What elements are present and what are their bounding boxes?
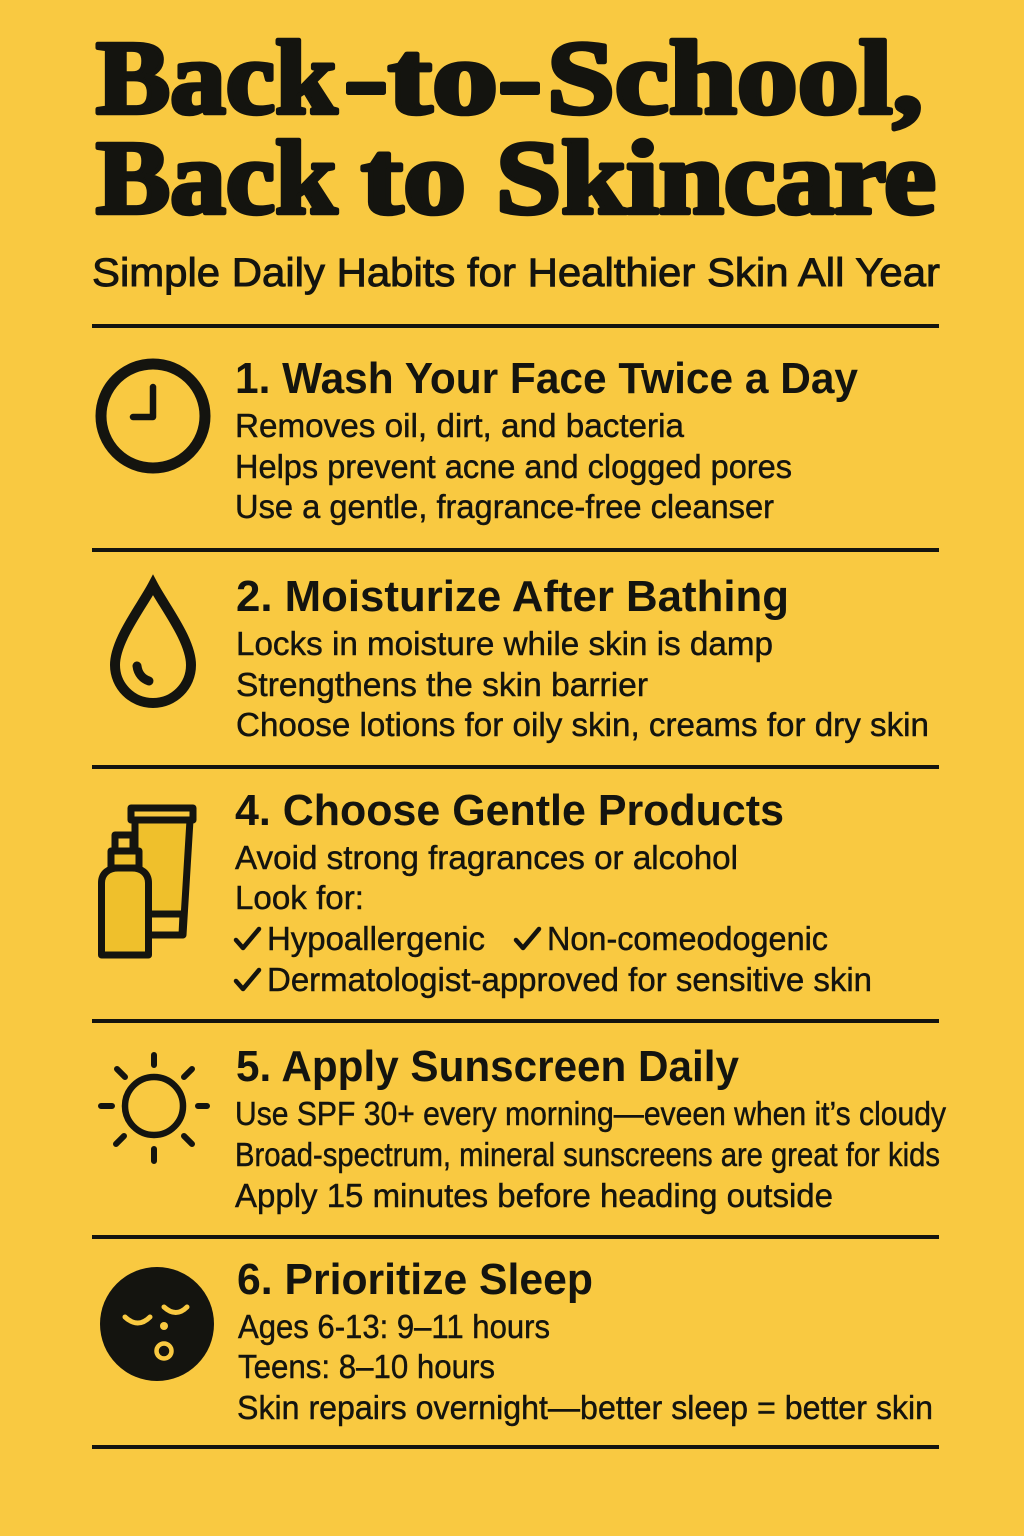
icon: tube and spray bottle [102, 808, 193, 955]
body 6: Skin repairs overnight—better sleep = better skin [237, 1389, 933, 1426]
section 1: wash your face [101, 354, 859, 525]
body 2: Locks in moisture while skin is damp [236, 625, 773, 662]
body 1: Removes oil, dirt, and bacteria [235, 407, 685, 444]
body 4: Avoid strong fragrances or alcohol [235, 839, 738, 876]
title: Back [96, 19, 338, 136]
subtitle: Simple Daily Habits for Healthier Skin All Year [92, 251, 940, 295]
body 2: Strengthens the skin barrier [236, 666, 648, 703]
checklist [236, 920, 872, 998]
body 5 [235, 1095, 946, 1214]
body 5: Use SPF 30+ every morning—eveen when it’s cloudy [235, 1095, 946, 1132]
title: Back [96, 119, 338, 236]
checklist: Dermatologist-approved for sensitive skin [267, 961, 872, 998]
icon: clock [101, 364, 205, 468]
title: Skincare [496, 119, 936, 236]
title [96, 19, 936, 236]
heading 4: 4. Choose Gentle Products [235, 786, 784, 835]
body 4 [235, 839, 872, 998]
body 6: Teens: 8–10 hours [238, 1348, 495, 1385]
body 2: Choose lotions for oily skin, creams for dry skin [236, 706, 929, 743]
heading 5: 5. Apply Sunscreen Daily [236, 1042, 739, 1091]
body 4: Look for: [235, 879, 364, 916]
body 1: Helps prevent acne and clogged pores [235, 448, 792, 485]
section 6: sleep [100, 1255, 933, 1426]
checklist: Non-comeodogenic [547, 920, 828, 957]
heading 6: 6. Prioritize Sleep [237, 1255, 593, 1304]
heading 2: 2. Moisturize After Bathing [236, 572, 789, 621]
title: School, [547, 19, 923, 136]
body 2 [236, 625, 929, 743]
body 5: Apply 15 minutes before heading outside [235, 1177, 833, 1214]
checklist: Hypoallergenic [267, 920, 485, 957]
body 6: Ages 6-13: 9–11 hours [238, 1308, 550, 1345]
body 1 [235, 407, 792, 525]
title: to [361, 119, 466, 236]
body 5: Broad-spectrum, mineral sunscreens are great for kids [235, 1136, 940, 1173]
section 5: sunscreen [101, 1042, 946, 1214]
icon: water drop [115, 585, 191, 703]
heading 1: 1. Wash Your Face Twice a Day [235, 354, 859, 403]
body 1: Use a gentle, fragrance-free cleanser [235, 488, 774, 525]
icon: sleeping face [100, 1267, 214, 1381]
icon: sun [101, 1055, 207, 1161]
body 6 [237, 1308, 933, 1426]
title: -to- [344, 19, 542, 136]
section 2: moisturize [115, 572, 929, 743]
section 4: gentle products [102, 786, 872, 998]
